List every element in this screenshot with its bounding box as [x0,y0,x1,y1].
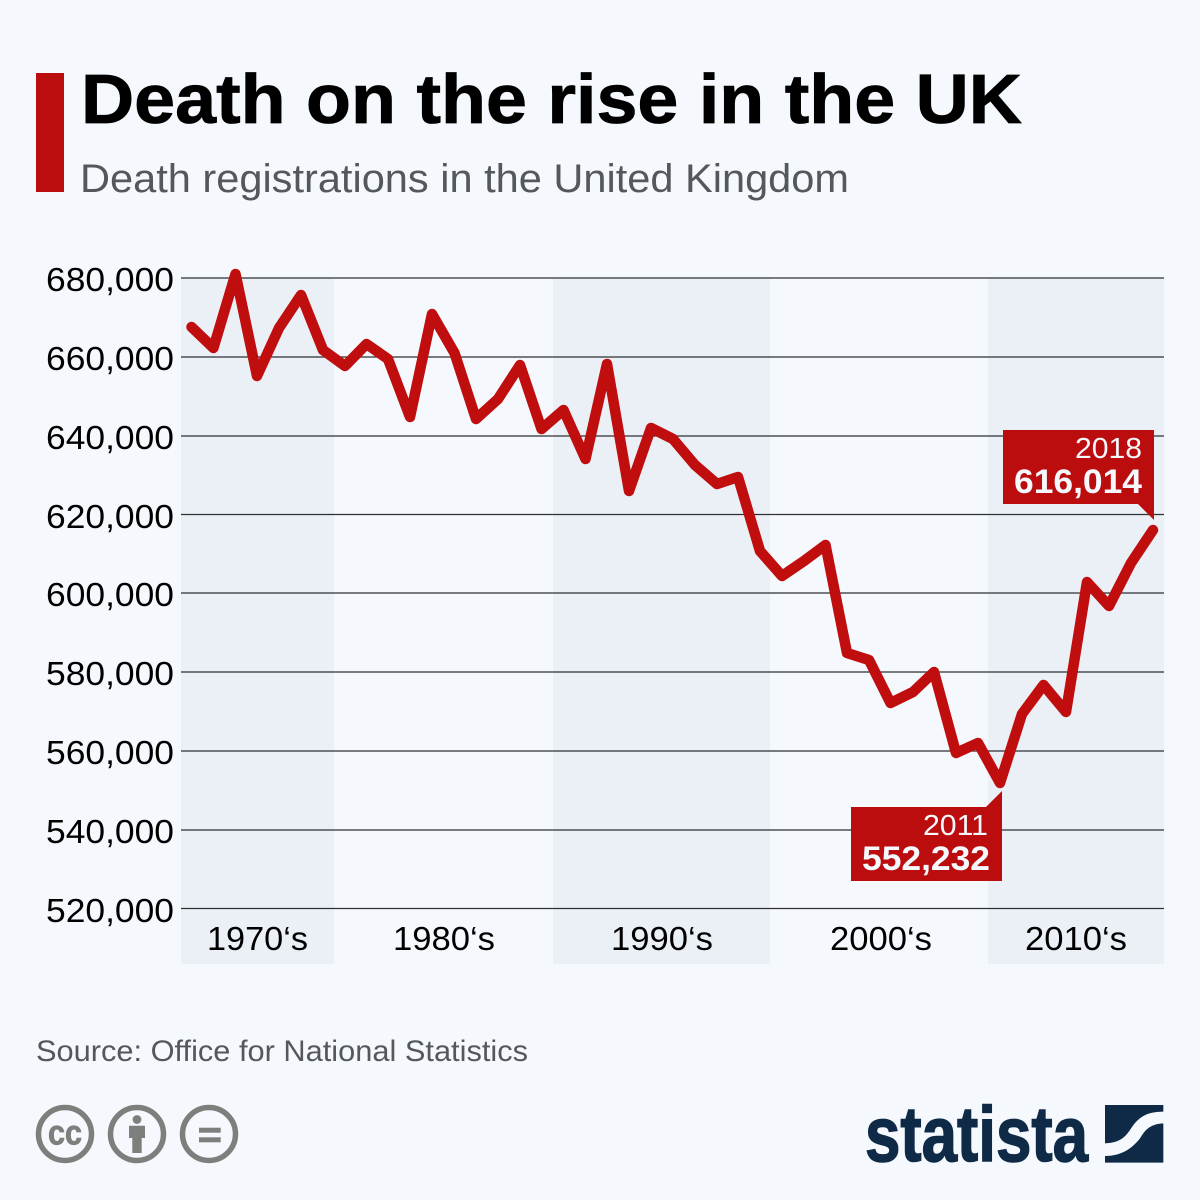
icon: no derivatives [182,1108,236,1160]
title accent bar [36,73,64,192]
y-axis labels: 680,000 [46,261,174,298]
title: Death on the rise in the UK [81,60,1022,138]
x-axis decade labels: 1980‘s [393,920,495,957]
callout: 2011 value: 2011 [923,810,988,842]
callout: 2018 value [1003,430,1154,520]
y-axis labels: 560,000 [46,734,174,771]
subtitle: Death registrations in the United Kingdom [80,157,849,201]
x-axis decade labels: 1990‘s [611,920,713,957]
x-axis decade labels: 1970‘s [207,920,308,957]
decade background bands [181,278,1164,964]
y-axis labels: 660,000 [46,340,174,377]
y-axis labels: 520,000 [46,892,174,929]
source note: Source: Office for National Statistics [36,1035,528,1068]
x-axis decade labels: 2010‘s [1025,920,1127,957]
callout: 2018 value: 616,014 [1014,463,1142,501]
horizontal grid lines [181,278,1164,908]
y-axis labels: 640,000 [46,419,174,456]
icon: creative commons: cc [48,1114,82,1152]
statista logo mark [1105,1105,1163,1163]
x-axis decade labels [207,920,1127,957]
y-axis labels: 580,000 [46,655,174,692]
callout: 2018 value: 2018 [1075,433,1142,465]
y-axis labels: 620,000 [46,498,174,535]
callout: 2011 value [851,791,1002,881]
y-axis labels [46,261,174,929]
callout: 2011 value: 552,232 [862,840,990,878]
x-axis decade labels: 2000‘s [830,920,932,957]
y-axis labels: 540,000 [46,813,174,850]
y-axis labels: 600,000 [46,576,174,613]
icon: attribution [110,1108,164,1160]
icon: creative commons [38,1108,92,1160]
line chart: death registrations [192,274,1153,783]
statista wordmark: statista [865,1090,1088,1178]
